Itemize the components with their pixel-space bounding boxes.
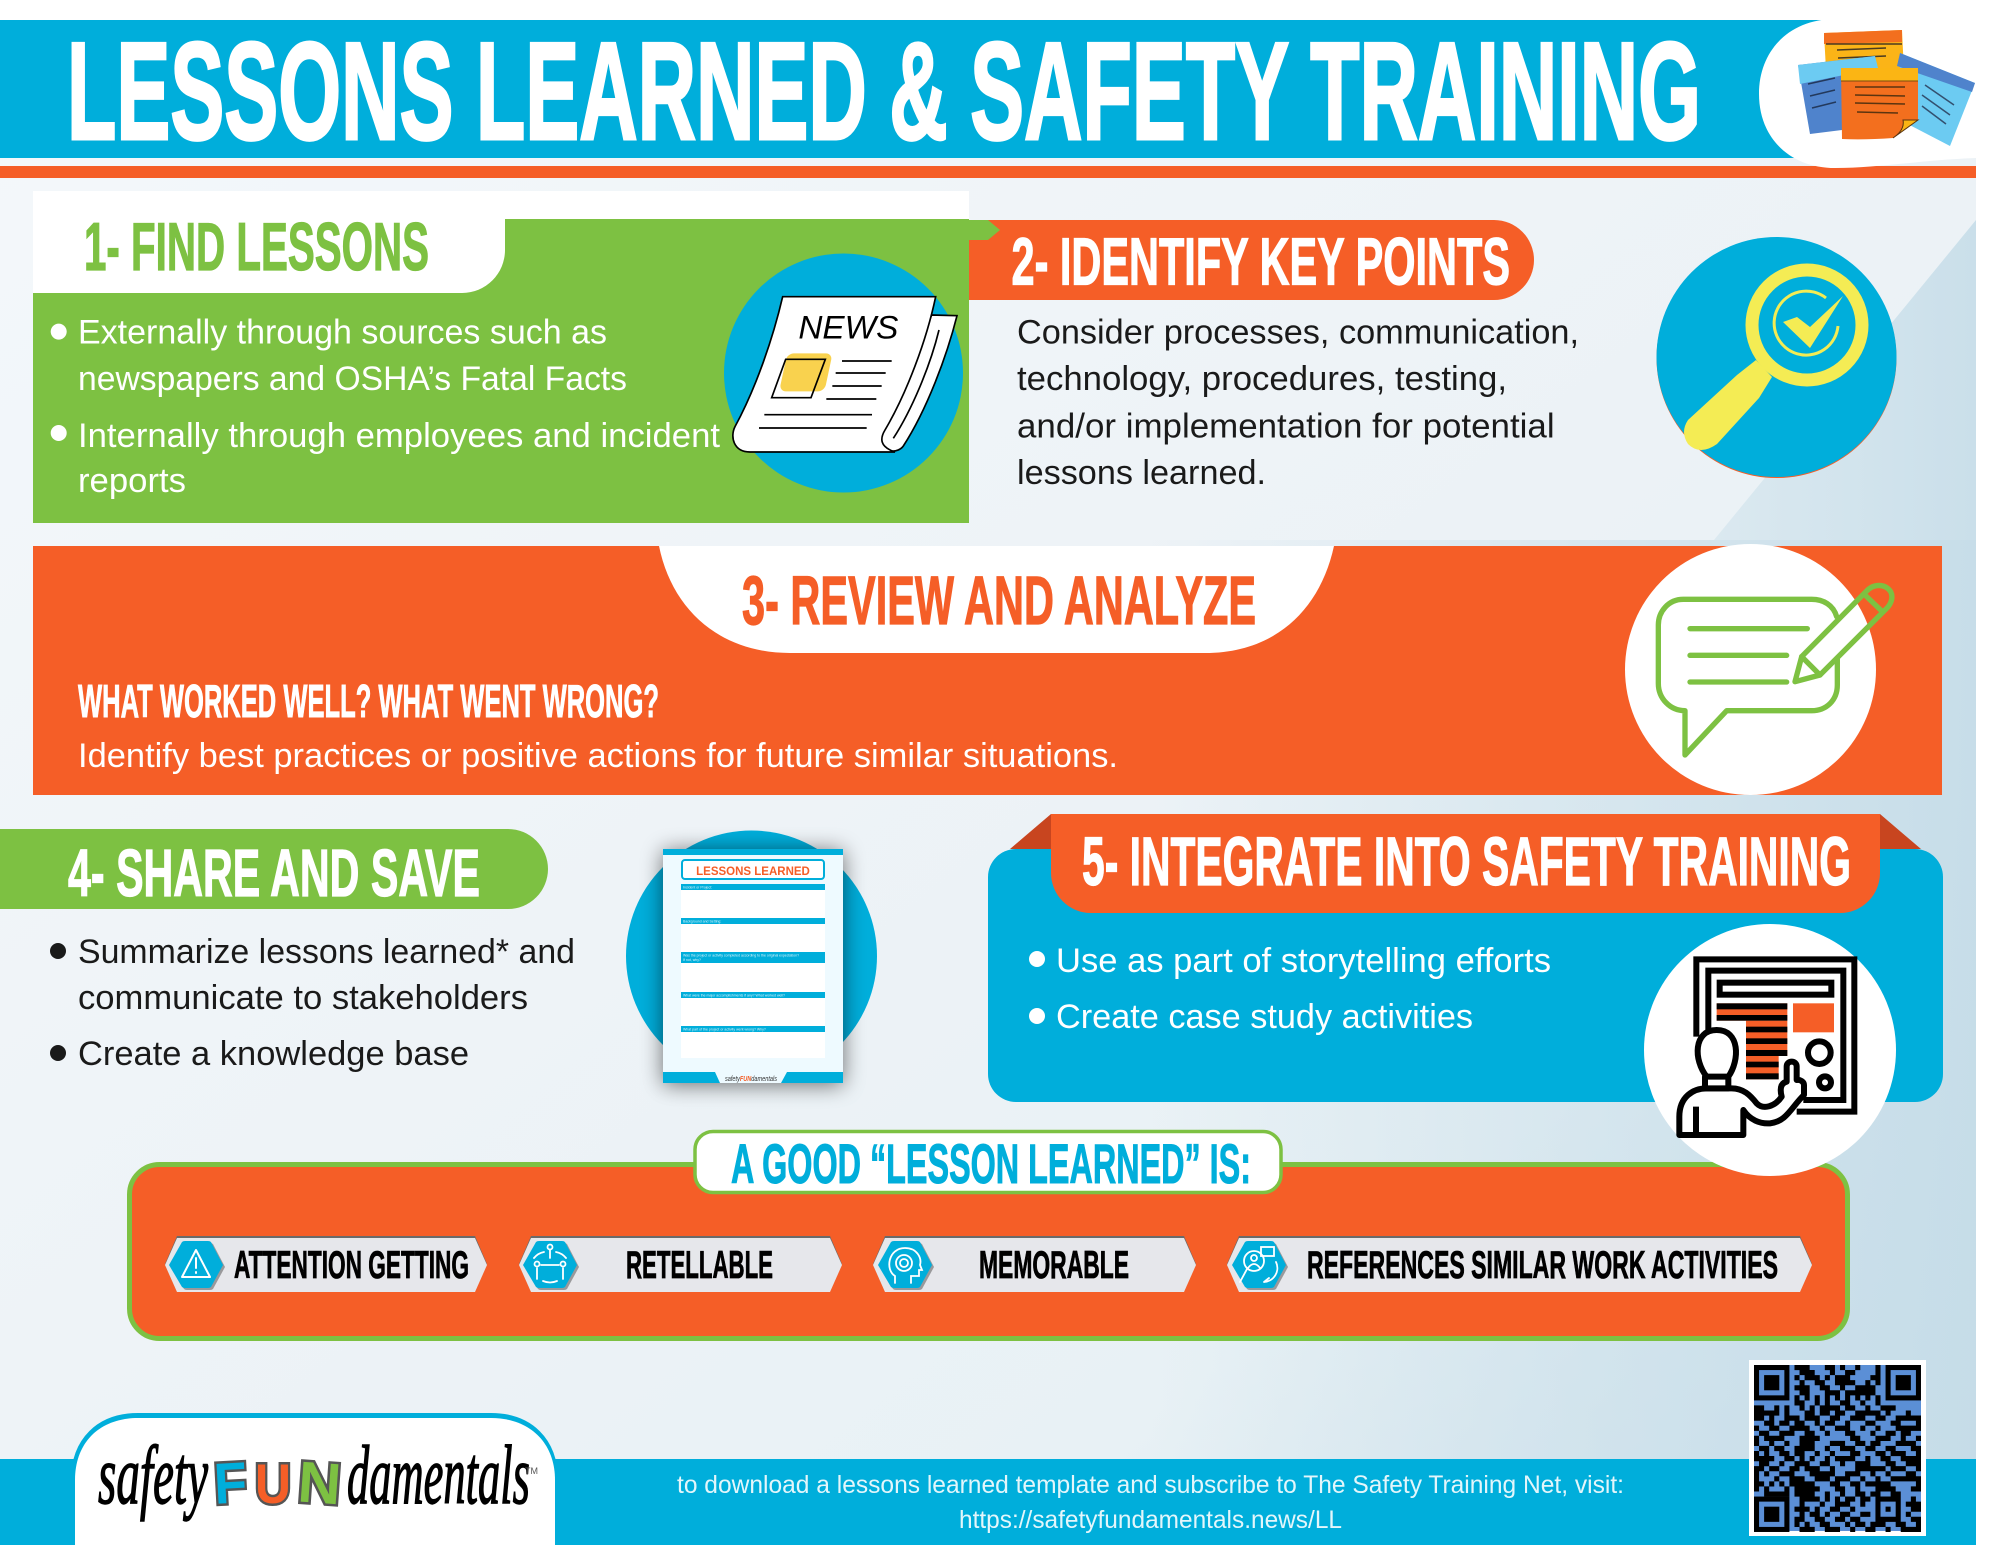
pill: references similar work activities bbox=[1227, 1236, 1812, 1292]
bullets: panel 4: Create a knowledge base bbox=[78, 1035, 469, 1073]
icon: newspaper: NEWS bbox=[798, 310, 898, 346]
icon: newspaper bbox=[724, 254, 963, 492]
logo wordmark bbox=[98, 1429, 538, 1522]
panel: a good lesson learned is bbox=[130, 1132, 1848, 1338]
heading tab 1 bbox=[33, 191, 505, 293]
bullets: panel 1: Externally through sources such as bbox=[78, 314, 607, 352]
bullets: panel 4: Summarize lessons learned* and bbox=[78, 933, 575, 971]
bullets: panel 1: reports bbox=[78, 462, 186, 500]
logo wordmark: U bbox=[255, 1452, 291, 1515]
icon: speech bubble and pencil bbox=[1625, 544, 1892, 795]
logo tab bbox=[72, 1414, 556, 1545]
icon: presenter at board bbox=[1644, 924, 1896, 1176]
label tab: A GOOD “LESSON LEARNED” IS: bbox=[731, 1132, 1251, 1195]
icon: lessons learned template: Was the project or activity completed according to the original expectation? bbox=[683, 954, 799, 958]
logo wordmark: N bbox=[296, 1450, 343, 1517]
logo wordmark: TM bbox=[525, 1466, 538, 1476]
pill: memorable bbox=[873, 1236, 1196, 1292]
heading ribbon 5 bbox=[1010, 814, 1921, 913]
heading bar 4 bbox=[0, 829, 548, 911]
subheading: WHAT WORKED WELL? WHAT WENT WRONG? bbox=[78, 675, 659, 727]
panel: 3 review and analyze bbox=[33, 544, 1942, 795]
label tab bbox=[695, 1132, 1281, 1195]
bullets: panel 4: communicate to stakeholders bbox=[78, 979, 528, 1017]
panel: 1 find lessons bbox=[33, 191, 1000, 523]
bullets: panel 5: Use as part of storytelling efforts bbox=[1056, 942, 1551, 980]
bullets: panel 5: Create case study activities bbox=[1056, 998, 1473, 1036]
bullets: panel 1 bbox=[51, 314, 721, 500]
text: review body: Identify best practices or positive actions for future similar situations. bbox=[78, 737, 1118, 775]
pill: retellable: RETELLABLE bbox=[626, 1244, 773, 1287]
icon: magnifier with check bbox=[1656, 237, 1896, 478]
footer text bbox=[677, 1471, 1624, 1534]
arrow tip bbox=[969, 220, 1000, 240]
pill: attention getting: ATTENTION GETTING bbox=[234, 1244, 469, 1287]
bullets: panel 1: Internally through employees and incident bbox=[78, 417, 721, 455]
bullets: panel 4 bbox=[50, 933, 575, 1073]
QR code bbox=[1749, 1360, 1926, 1536]
icon: lessons learned template: safetyFUNdamentals bbox=[725, 1076, 777, 1083]
heading tab 3 bbox=[659, 546, 1334, 653]
text: key points body: Consider processes, communication, bbox=[1017, 314, 1579, 352]
heading bar 2 bbox=[969, 220, 1534, 300]
panel: 4 share and save bbox=[0, 829, 877, 1085]
footer band bbox=[0, 1459, 1976, 1545]
text: key points body: and/or implementation for potential bbox=[1017, 408, 1555, 446]
footer text: https://safetyfundamentals.news/LL bbox=[959, 1506, 1342, 1534]
text: key points body: lessons learned. bbox=[1017, 454, 1266, 492]
logo wordmark: damentals bbox=[347, 1429, 530, 1522]
icon: lessons learned template: If not, why? bbox=[683, 958, 701, 962]
logo wordmark: F bbox=[212, 1450, 249, 1517]
icon: lessons learned template: What part of the project or activity went wrong? Why? bbox=[683, 1028, 766, 1032]
white tab behind sticky notes bbox=[1759, 19, 1976, 168]
icon: lessons learned template: LESSONS LEARNED bbox=[696, 866, 810, 878]
icon: lessons learned template: What were the major accomplishments if any? What worked well? bbox=[683, 994, 785, 998]
orange rule bbox=[0, 166, 1976, 178]
heading tab 1: 1- FIND LESSONS bbox=[84, 209, 429, 285]
icon: sticky notes bbox=[1798, 30, 1975, 146]
text: key points body: technology, procedures, testing, bbox=[1017, 360, 1507, 398]
icon: lessons learned template: Incident or Project: bbox=[683, 886, 712, 890]
footer text: to download a lessons learned template and subscribe to The Safety Training Net, visit: bbox=[677, 1471, 1624, 1499]
text: key points body bbox=[1017, 314, 1579, 492]
icon: lessons learned template: Background and Setting: bbox=[683, 920, 721, 924]
bullets: panel 5 bbox=[1029, 942, 1551, 1036]
bullets: panel 1: newspapers and OSHA’s Fatal Facts bbox=[78, 360, 627, 398]
panel: 2 identify key points bbox=[969, 220, 1896, 492]
pill: retellable bbox=[519, 1236, 842, 1292]
logo wordmark: safety bbox=[98, 1429, 208, 1522]
icon: lessons learned template bbox=[626, 830, 877, 1085]
heading bar 2: 2- IDENTIFY KEY POINTS bbox=[1012, 224, 1510, 300]
panel: 5 integrate into safety training bbox=[988, 814, 1943, 1102]
pill: memorable: MEMORABLE bbox=[979, 1244, 1129, 1287]
pill: attention getting bbox=[165, 1236, 487, 1292]
heading bar 4: 4- SHARE AND SAVE bbox=[68, 836, 480, 911]
title banner bbox=[0, 14, 1830, 169]
heading tab 3: 3- REVIEW AND ANALYZE bbox=[742, 562, 1256, 639]
